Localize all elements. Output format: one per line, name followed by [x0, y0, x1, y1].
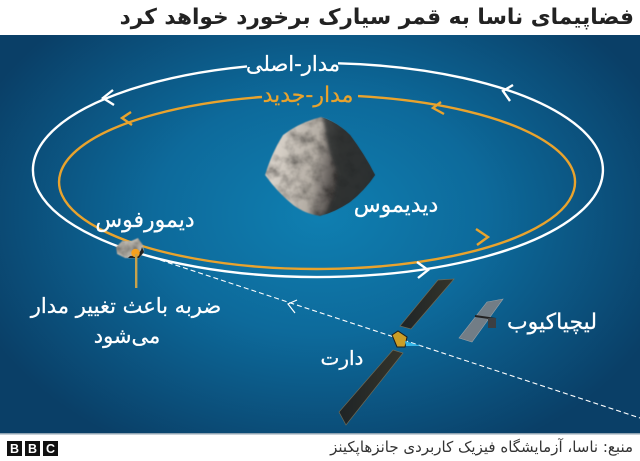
logo: BBC: C: [46, 442, 55, 456]
ion thruster: [405, 341, 421, 346]
lower solar panel: [339, 350, 403, 425]
label: LICIACube: لیچیاکیوب: [507, 310, 597, 335]
spacecraft body: [392, 331, 407, 347]
source text: منبع: ناسا، آزمایشگاه فیزیک کاربردی جانزهاپکینز: [329, 438, 633, 457]
label: DART: دارت: [321, 346, 363, 370]
arrow: original orbit top left: [103, 90, 114, 105]
chart: original orbit (white): [33, 63, 603, 278]
label: impact changes orbit: می‌شود: [94, 324, 160, 348]
arrow: original orbit top right: [503, 85, 513, 101]
title: فضاپیمای ناسا به قمر سیارک برخورد خواهد کرد: [120, 5, 634, 30]
label: Didymos: دیدیموس: [354, 193, 438, 218]
arrow: trajectory direction: [288, 300, 297, 313]
logo: BBC: [7, 441, 58, 456]
icon: Dimorphos moon with impact: [116, 238, 144, 258]
icon: DART spacecraft: [339, 279, 454, 425]
impact callout line: [135, 254, 137, 288]
label: new orbit: مدار-جدید: [263, 83, 353, 108]
label: impact changes orbit: [30, 294, 221, 348]
arrow: new orbit top right: [433, 102, 444, 114]
logo: BBC: B: [28, 442, 37, 456]
upper solar panel: [400, 279, 454, 329]
logo: BBC: B: [10, 442, 19, 456]
arrow: original orbit bottom: [417, 262, 428, 278]
arrow: new orbit top left: [122, 112, 132, 125]
icon: LICIACube satellite: [459, 299, 503, 342]
footer rule: [0, 433, 640, 434]
label: Dimorphos: دیمورفوس: [95, 208, 195, 233]
label: original orbit: مدار-اصلی: [246, 52, 340, 76]
label: impact changes orbit: ضربه باعث تغییر مدار: [30, 294, 221, 318]
chart: new orbit (orange): [59, 96, 575, 269]
icon: Didymos asteroid: [264, 116, 376, 216]
dashed trajectory of DART: [145, 255, 640, 418]
arrow: new orbit bottom: [476, 229, 488, 245]
